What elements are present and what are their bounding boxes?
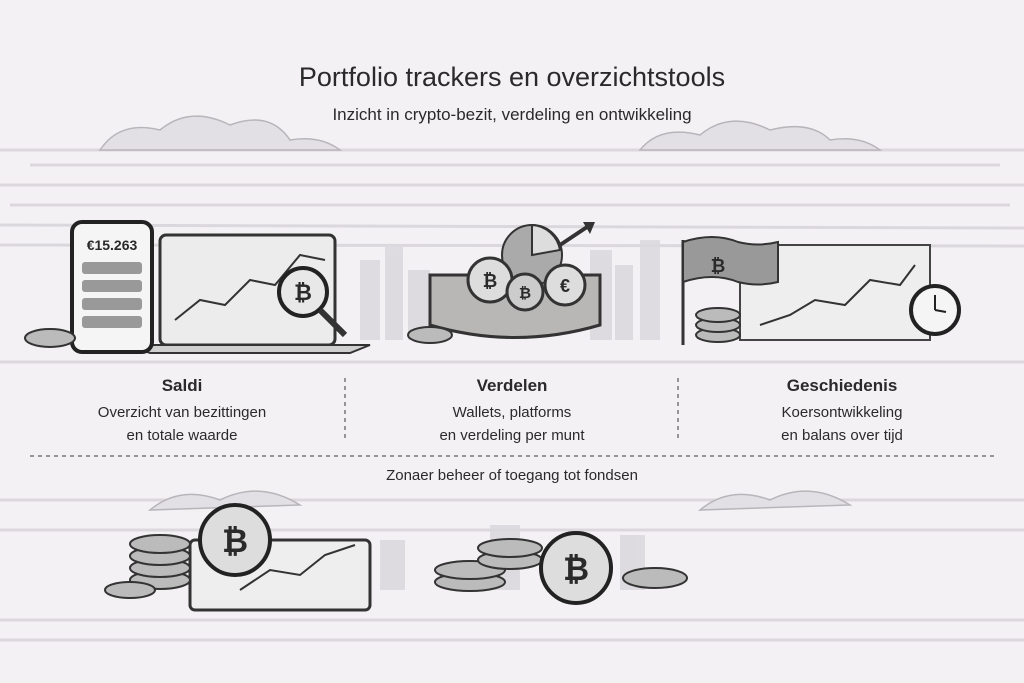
bottom illustration	[105, 505, 687, 610]
title: Portfolio trackers en overzichtstools	[299, 62, 725, 92]
column: geschiedenis: Koersontwikkeling	[782, 404, 902, 421]
illustration: verdelen	[408, 222, 600, 343]
footer note: Zonaer beheer of toegang tot fondsen	[386, 467, 638, 484]
column: geschiedenis: Geschiedenis	[787, 376, 897, 395]
bottom illustration: ₿	[222, 523, 248, 559]
illustration: verdelen: ₿	[483, 271, 497, 291]
clouds	[100, 116, 880, 510]
bottom illustration: ₿	[563, 551, 589, 587]
illustration: saldi: €15.263	[87, 237, 138, 253]
subtitle: Inzicht in crypto-bezit, verdeling en ontwikkeling	[332, 105, 692, 124]
illustration: saldi	[25, 222, 370, 353]
column: geschiedenis: en balans over tijd	[781, 427, 903, 444]
column: verdelen: en verdeling per munt	[439, 427, 585, 444]
illustration: verdelen: €	[560, 276, 570, 296]
column: saldi	[98, 376, 266, 444]
illustration: verdelen: ₿	[519, 285, 531, 302]
column: saldi: en totale waarde	[127, 427, 237, 444]
illustration: geschiedenis	[683, 237, 959, 345]
skyline	[360, 240, 660, 590]
column: verdelen: Wallets, platforms	[453, 404, 571, 421]
column: saldi: Overzicht van bezittingen	[98, 404, 266, 421]
column: verdelen: Verdelen	[477, 376, 547, 395]
illustration: geschiedenis: ₿	[711, 256, 725, 276]
column: saldi: Saldi	[162, 376, 202, 395]
background streaks	[0, 150, 1024, 640]
illustration: saldi: ₿	[294, 280, 312, 305]
column: geschiedenis	[781, 376, 903, 444]
column: verdelen	[439, 376, 585, 444]
